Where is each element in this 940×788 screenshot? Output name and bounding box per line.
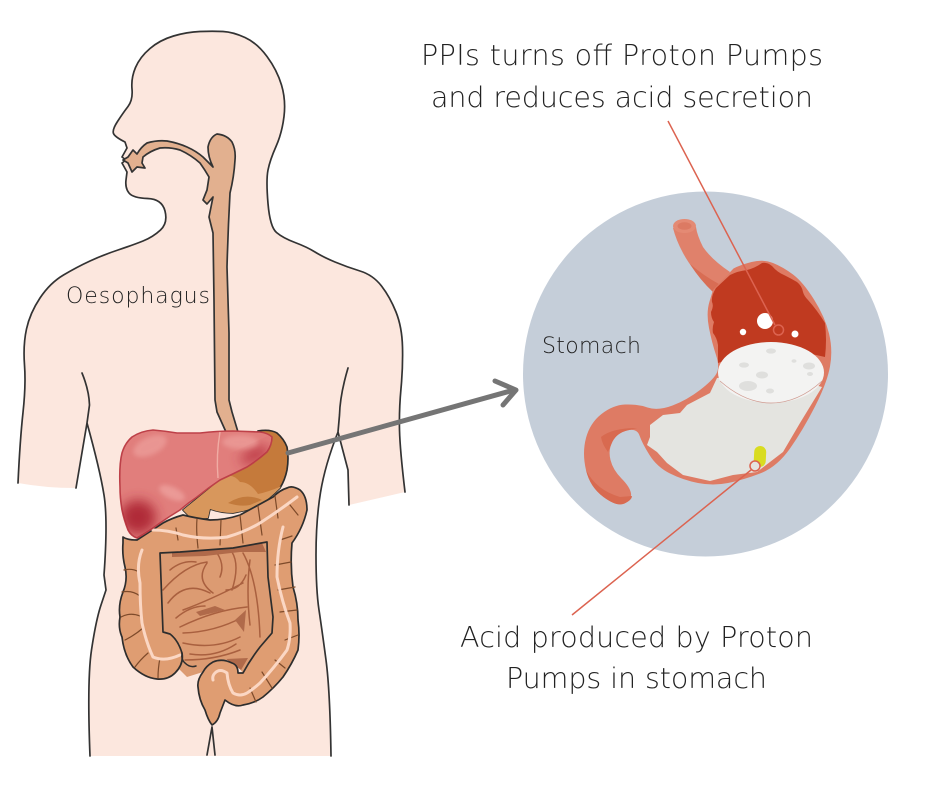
heading: PPIs action: and reduces acid secretion [431, 81, 813, 114]
white bubbles [740, 313, 798, 338]
colon body [119, 487, 307, 725]
stomach body [183, 430, 288, 518]
liver shading and highlights [120, 430, 272, 534]
small intestine folds [163, 552, 260, 660]
pointer: PPI line and ring [668, 121, 784, 335]
colon centre bands [138, 497, 297, 695]
body fill [18, 31, 405, 756]
heading: acid production: Pumps in stomach [506, 662, 767, 695]
small intestine mass [160, 540, 273, 677]
colon haustra creases [121, 496, 298, 702]
stomach in torso [180, 430, 288, 525]
heading: acid production [460, 621, 813, 695]
detailed stomach illustration [584, 219, 831, 504]
liver shape [120, 430, 272, 538]
arrow from stomach to circle [288, 381, 516, 453]
stomach wall [584, 261, 831, 504]
stomach lighter fold [183, 476, 281, 518]
label: Oesophagus: Oesophagus [66, 284, 210, 309]
heading: acid production: Acid produced by Proton [460, 621, 813, 654]
yellow capsule [753, 446, 767, 467]
pyloric shading [586, 428, 637, 504]
appendix [182, 653, 196, 667]
small intestine [160, 540, 273, 677]
heading: PPIs action [421, 39, 823, 114]
large intestine [119, 487, 307, 725]
small intestine shadows [172, 543, 266, 670]
acid red upper chamber [711, 263, 826, 363]
grey stomach contents [647, 372, 822, 481]
body outline [18, 31, 405, 756]
surface spots [739, 348, 815, 394]
label: Stomach: Stomach [542, 334, 641, 359]
stomach callout circle [523, 192, 888, 556]
heading: PPIs action: PPIs turns off Proton Pumps [421, 39, 823, 72]
body silhouette [18, 31, 405, 756]
white acid surface [718, 342, 824, 403]
surface edge [720, 381, 822, 403]
pointer: acid line and ring [572, 461, 760, 615]
oesophagus stub [673, 219, 730, 292]
oesophagus tube [123, 134, 238, 432]
liver [120, 430, 272, 538]
